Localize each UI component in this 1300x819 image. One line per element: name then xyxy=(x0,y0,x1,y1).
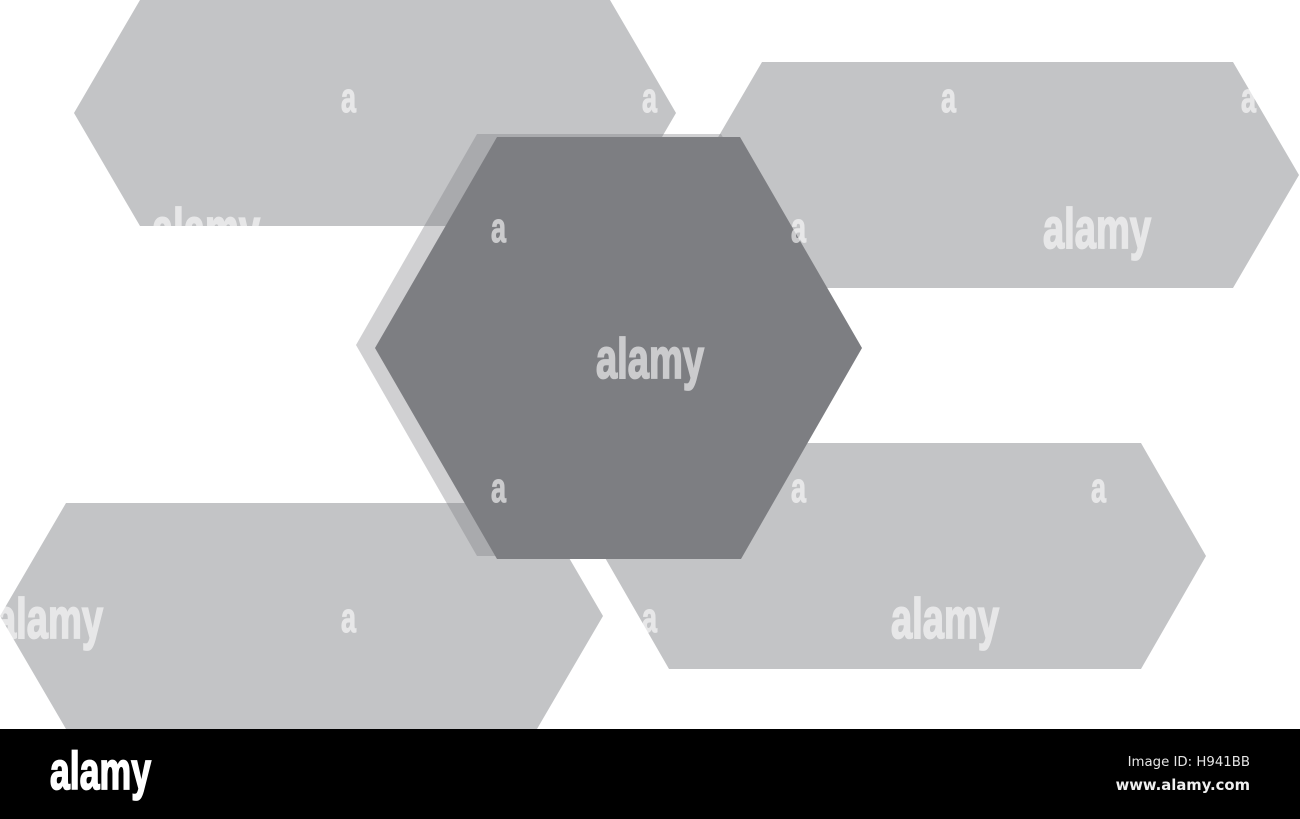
panel: top left hexagonal bar xyxy=(74,0,676,226)
image id: Image ID: H941BB xyxy=(1128,755,1250,770)
watermark: large words: alamy xyxy=(596,327,704,391)
panel: lower left hexagonal bar xyxy=(0,503,603,729)
watermark: small letters: a xyxy=(1241,74,1256,121)
watermark: small letters: a xyxy=(1091,464,1106,511)
watermark: small letters: a xyxy=(642,74,657,121)
watermark: small letters: a xyxy=(491,204,506,251)
watermark: small letters: a xyxy=(791,204,806,251)
central hexagon shadow xyxy=(356,134,843,556)
watermark: small letters: a xyxy=(941,74,956,121)
watermark: large words: alamy xyxy=(891,587,999,651)
panel: top right hexagonal bar xyxy=(696,62,1299,288)
watermark: small letters: a xyxy=(791,464,806,511)
footer logo: alamy xyxy=(50,742,151,801)
watermark: large words xyxy=(0,197,1151,651)
footer band xyxy=(0,729,1300,819)
panel: lower right hexagonal bar xyxy=(604,443,1206,669)
watermark: small letters: a xyxy=(341,594,356,641)
watermark: large words: alamy xyxy=(1043,197,1151,261)
watermark layer xyxy=(0,74,1256,651)
website address: www.alamy.com xyxy=(1116,777,1250,794)
watermark: small letters xyxy=(341,74,1256,641)
watermark: small letters: a xyxy=(642,594,657,641)
central hexagon xyxy=(375,137,862,559)
watermark: small letters: a xyxy=(341,74,356,121)
watermark: small letters: a xyxy=(491,464,506,511)
watermark: large words: alamy xyxy=(152,197,260,261)
